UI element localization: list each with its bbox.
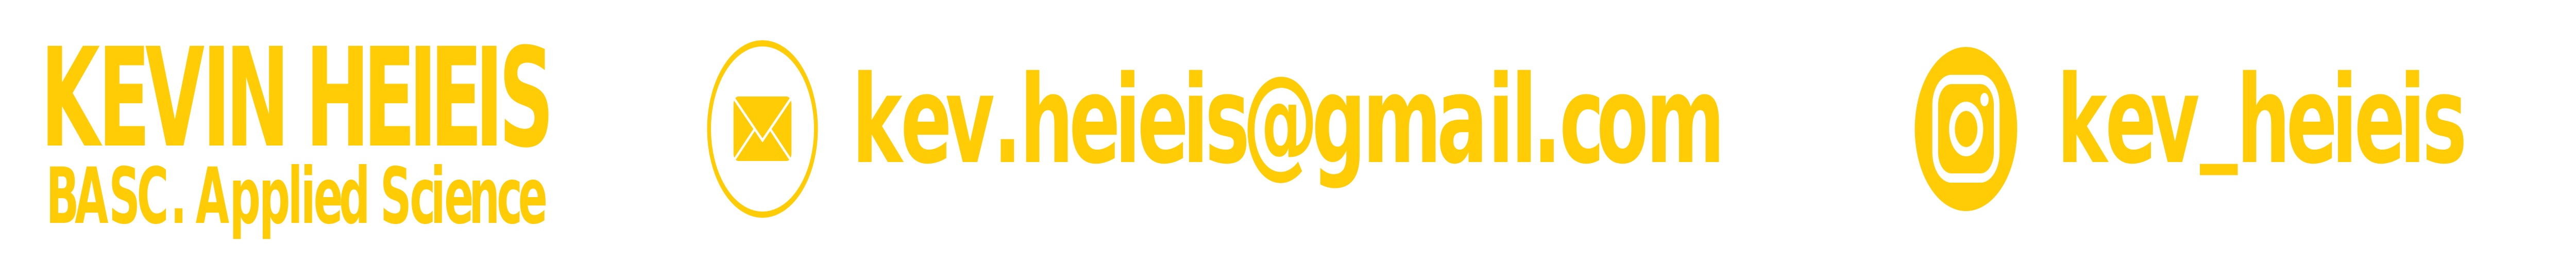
subheading: degree: BASC. Applied Science [46,151,548,241]
text: instagram handle: kev_heieis [2057,35,2467,191]
icon: instagram camera badge [1915,47,2017,211]
heading: name: KEVIN HEIEIS [41,18,554,178]
name and degree block [41,18,554,241]
icon: envelope in ring [709,43,816,215]
text: email address: kev.heieis@gmail.com [852,50,1725,191]
